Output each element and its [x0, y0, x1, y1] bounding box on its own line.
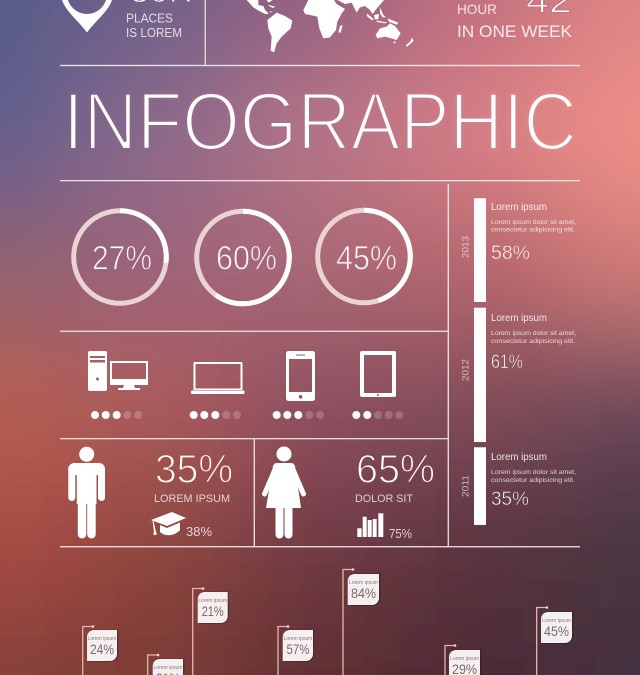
flag: 57%: Lorem ipsum — [284, 636, 312, 642]
icon: laptop — [191, 362, 244, 394]
male percentage: 35% — [155, 448, 233, 492]
icon: graduation cap — [151, 512, 186, 535]
flag: 84% — [343, 568, 380, 675]
panel: female statistic — [264, 446, 435, 541]
panel: male statistic — [68, 447, 233, 539]
flag: 31% — [148, 654, 184, 675]
rating dots: laptop — [190, 411, 241, 419]
timeline: 2012: 61% — [491, 351, 523, 373]
flag: 21%: 21% — [202, 604, 224, 619]
places label: PLACES — [126, 12, 173, 26]
flag: 57% — [278, 625, 314, 675]
donut chart: 45% — [318, 210, 410, 303]
icon: smartphone — [286, 351, 315, 401]
timeline: 2013: Lorem ipsum — [491, 201, 547, 213]
icon: bar chart — [357, 513, 383, 537]
timeline: 2013: 58% — [491, 242, 530, 264]
timeline: 2012: 2012 — [460, 359, 472, 381]
donut chart: 60% — [197, 211, 289, 304]
flag: 29%: Lorem ipsum — [450, 656, 479, 662]
flag: 45% — [537, 606, 574, 675]
timeline: 2011: 2011 — [460, 475, 472, 497]
timeline: 2013: consectetur adipisicing elit. — [491, 226, 575, 234]
donut chart: 27%: 27% — [92, 240, 152, 278]
timeline: 2013: Lorem ipsum dolor sit amet, — [491, 219, 576, 226]
education percentage: 38% — [186, 525, 212, 539]
timeline: 2012: consectetur adipisicing elit. — [491, 338, 575, 345]
icon: man — [68, 447, 105, 538]
donut chart: 60%: 60% — [216, 240, 277, 278]
flag: 84%: Lorem ipsum — [349, 580, 378, 586]
flag: 45%: Lorem ipsum — [542, 618, 571, 624]
flag: 24%: 24% — [90, 642, 114, 657]
icon: woman — [264, 446, 304, 538]
flag: 31%: Lorem ipsum — [154, 665, 182, 671]
timeline: 2011: Lorem ipsum dolor sit amet, — [491, 469, 576, 476]
flag: 24%: Lorem ipsum — [88, 636, 116, 642]
rating dots: tablet — [352, 411, 403, 419]
flag: 45%: 45% — [544, 624, 569, 639]
male label: LOREM IPSUM — [154, 493, 230, 505]
flag: 24% — [83, 625, 118, 675]
female label: DOLOR SIT — [355, 493, 413, 505]
icon: map pin — [61, 0, 113, 32]
top stat: places — [61, 0, 192, 40]
donut chart: 27% — [74, 211, 166, 303]
female percentage: 65% — [356, 448, 435, 492]
timeline: 2013 — [460, 198, 576, 302]
flag: 57%: 57% — [286, 642, 310, 657]
timeline: 2011 — [460, 447, 576, 525]
rating dots: desktop — [91, 411, 142, 419]
timeline: 2012: Lorem ipsum — [491, 312, 547, 324]
places label — [126, 12, 182, 40]
timeline: 2012 — [460, 308, 576, 442]
timeline: 2011: consectetur adipisicing elit. — [491, 477, 575, 484]
timeline: 2011: 35% — [491, 488, 529, 510]
flag: 21% — [193, 587, 229, 675]
flag: 29% — [445, 644, 482, 675]
title: INFOGRAPHIC — [63, 76, 577, 168]
donut chart: 45%: 45% — [336, 240, 397, 278]
flag: 84%: 84% — [351, 586, 376, 601]
places label: IS LOREM — [126, 26, 182, 40]
top stat: hours — [457, 0, 573, 41]
one week label: IN ONE WEEK — [457, 22, 573, 41]
icon: tablet — [360, 351, 396, 397]
chart percentage: 75% — [389, 527, 412, 541]
world map — [247, 0, 414, 52]
timeline: 2012: Lorem ipsum dolor sit amet, — [491, 330, 576, 337]
flag: 21%: Lorem ipsum — [198, 598, 227, 604]
rating dots: smartphone — [273, 411, 324, 419]
icon: desktop computer — [88, 351, 148, 391]
timeline: 2013: 2013 — [460, 236, 472, 258]
timeline: 2011: Lorem ipsum — [491, 451, 547, 463]
hour label: HOUR — [457, 1, 497, 17]
